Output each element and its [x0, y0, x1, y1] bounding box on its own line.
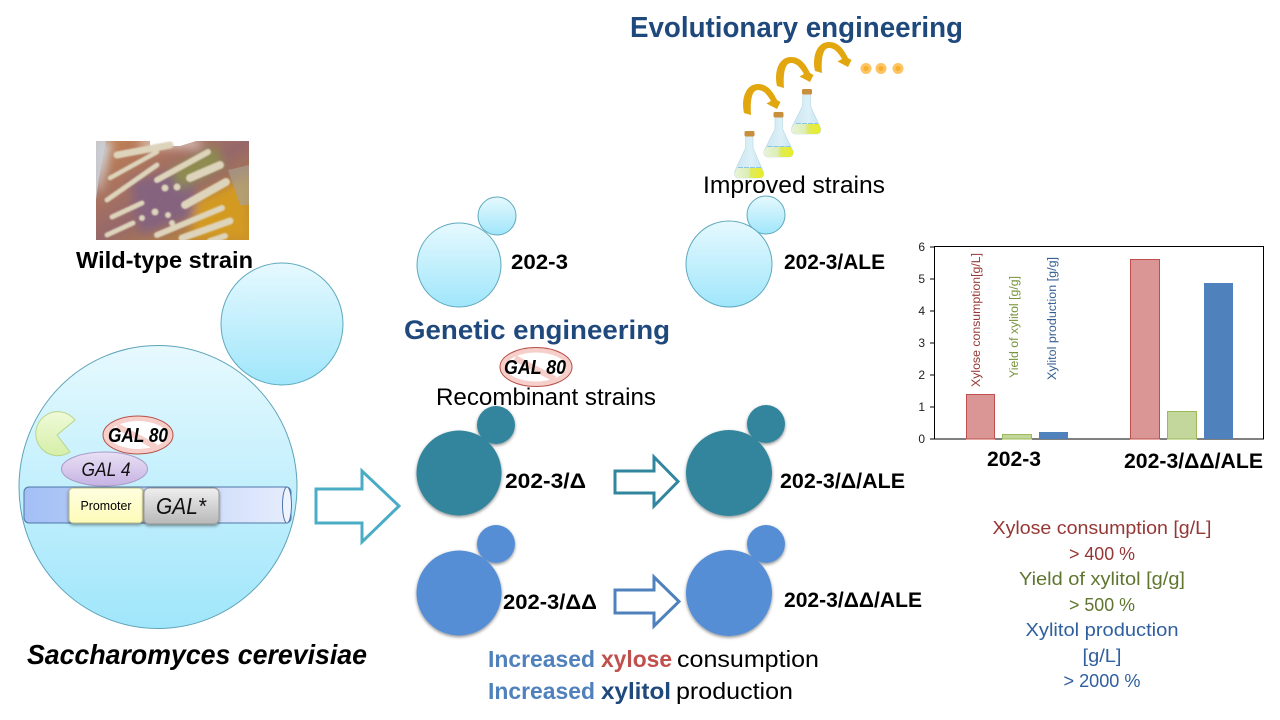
bar chart: [918, 240, 1264, 473]
heading: Recombinant strains: Recombinant strains: [436, 384, 656, 411]
text: increased xylitol production: [488, 678, 793, 704]
text: improvement percentages: Xylitol production: [1026, 619, 1178, 640]
bars: 202-3: [966, 394, 1068, 439]
cell: 202-3/Δ/ALE: [686, 405, 785, 516]
y-axis labels: 1: [918, 400, 925, 414]
label: 202-3/Δ/ALE: 202-3/Δ/ALE: [780, 470, 905, 493]
y-axis labels: [918, 240, 925, 446]
promoter box: [69, 488, 143, 523]
arrow: ΔΔ evolution: [615, 577, 679, 626]
icon: continuation dots: [860, 63, 904, 74]
GAL* gene box: GAL*: [156, 493, 207, 519]
rotated series label: yield of xylitol: Yield of xylitol [g/g]: [1009, 276, 1021, 378]
label: 202-3: 202-3: [511, 251, 568, 274]
text: increased xylose consumption: xylose: [601, 646, 672, 672]
cell: 202-3/ΔΔ: [416, 525, 515, 636]
bars: 202-3/ΔΔ/ALE: [1130, 260, 1233, 439]
icon: GAL 80 deletion: [103, 416, 173, 454]
icon: GAL 80 deletion: [500, 348, 572, 386]
label: 202-3/ALE: 202-3/ALE: [784, 251, 885, 274]
label: 202-3/Δ: 202-3/Δ: [505, 470, 586, 493]
cell: 202-3/ΔΔ/ALE: [686, 525, 785, 636]
text: increased xylose consumption: Increased: [488, 646, 595, 672]
cell: large yeast bud: [221, 263, 343, 385]
text: improvement percentages: > 2000 %: [1064, 670, 1140, 691]
text: increased xylose consumption: consumption: [677, 646, 819, 672]
y-axis labels: 4: [918, 304, 925, 318]
y-axis labels: 2: [918, 368, 925, 382]
text: improvement percentages: Yield of xylitol [g/g]: [1019, 568, 1185, 589]
text: increased xylose consumption: [488, 646, 819, 672]
photo: wild-type yeast plate: [96, 141, 250, 241]
arrow: transfer 1: [743, 84, 780, 115]
title: Evolutionary engineering: Evolutionary engineering: [630, 12, 963, 44]
cell: large yeast with GAL regulation: [19, 346, 297, 628]
label: 202-3/ΔΔ: 202-3/ΔΔ: [503, 591, 597, 614]
label: 202-3/ΔΔ/ALE: 202-3/ΔΔ/ALE: [784, 589, 922, 612]
DNA tube: [24, 487, 292, 523]
heading: Genetic engineering: Genetic engineering: [404, 315, 670, 345]
y-axis labels: 3: [918, 336, 925, 350]
GAL 4 ellipse: [62, 452, 148, 486]
text: improvement percentages: Xylose consumption [g/L]: [992, 517, 1212, 538]
icon: flask 1: [734, 131, 764, 178]
arrow: transfer 2: [776, 57, 814, 88]
text: improvement percentages: > 500 %: [1069, 594, 1135, 615]
label: Saccharomyces cerevisiae: Saccharomyces cerevisiae: [27, 639, 367, 670]
icon: flask 3: [791, 89, 821, 134]
category label: 202-3/ΔΔ/ALE: 202-3/ΔΔ/ALE: [1124, 450, 1263, 473]
text: improvement percentages: [g/L]: [1082, 645, 1122, 666]
cell: 202-3/ALE: [686, 196, 785, 307]
arrow: large outline arrow: [316, 471, 399, 542]
icon: flask 2: [764, 112, 793, 157]
cell: 202-3/Δ: [416, 406, 515, 516]
y-axis labels: 5: [918, 272, 925, 286]
arrow: transfer 3: [814, 42, 852, 73]
rotated series label: xylitol production: Xylitol production [g/g]: [1047, 257, 1059, 380]
icon: GAL 80 deletion: GAL 80: [504, 357, 566, 379]
text: increased xylitol production: production: [676, 678, 793, 704]
icon: GAL 80 deletion: GAL 80: [108, 425, 168, 447]
text: increased xylitol production: xylitol: [601, 678, 671, 704]
y-axis labels: 0: [918, 432, 925, 446]
arrow: Δ evolution: [615, 457, 678, 506]
promoter box: Promoter: [80, 499, 132, 513]
GAL* gene box: [144, 488, 219, 524]
text: increased xylitol production: Increased: [488, 678, 595, 704]
chart frame and axis: [930, 246, 1264, 439]
rotated series label: xylose consumption: Xylose consumption[g/L]: [971, 253, 983, 387]
heading: Improved strains: Improved strains: [703, 172, 885, 199]
text: improvement percentages: > 400 %: [1069, 543, 1135, 564]
category label: 202-3: 202-3: [987, 448, 1041, 471]
icon: pac-man activator: [36, 412, 75, 456]
label: Wild-type strain: Wild-type strain: [76, 247, 253, 273]
cell: 202-3: [417, 197, 516, 307]
GAL 4 ellipse: GAL 4: [82, 460, 130, 481]
y-axis labels: 6: [918, 240, 925, 254]
text: improvement percentages: [992, 517, 1212, 691]
icon: serial transfer flasks and arrows: [734, 42, 904, 178]
